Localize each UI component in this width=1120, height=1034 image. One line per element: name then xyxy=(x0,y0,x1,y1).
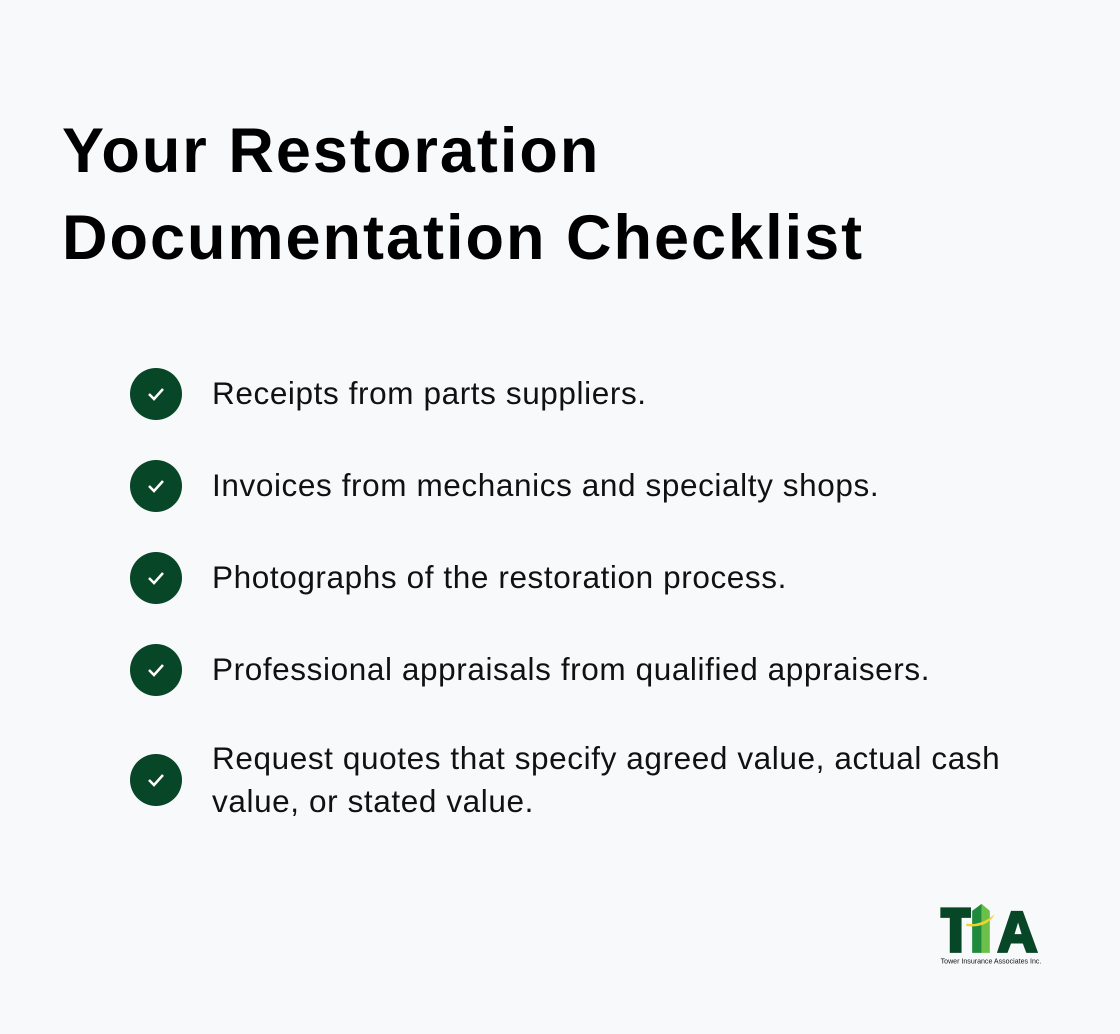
item 5: Request quotes that specify agreed value, actual cash xyxy=(212,740,1000,776)
item 5: value, or stated value. xyxy=(212,783,534,819)
item 5 xyxy=(130,740,1000,819)
item 2: Invoices from mechanics and specialty shops. xyxy=(212,467,879,503)
logo: Tower Insurance Associates Inc. xyxy=(941,958,1041,965)
item 2 xyxy=(130,460,879,512)
title: Your Restoration xyxy=(62,116,600,186)
title: Documentation Checklist xyxy=(62,203,864,273)
item 4: Professional appraisals from qualified appraisers. xyxy=(212,651,930,687)
logo xyxy=(940,904,1041,965)
item 3 xyxy=(130,552,787,604)
item 4 xyxy=(130,644,930,696)
item 3: Photographs of the restoration process. xyxy=(212,559,787,595)
item 1: Receipts from parts suppliers. xyxy=(212,375,647,411)
title xyxy=(62,116,864,273)
item 1 xyxy=(130,368,647,420)
